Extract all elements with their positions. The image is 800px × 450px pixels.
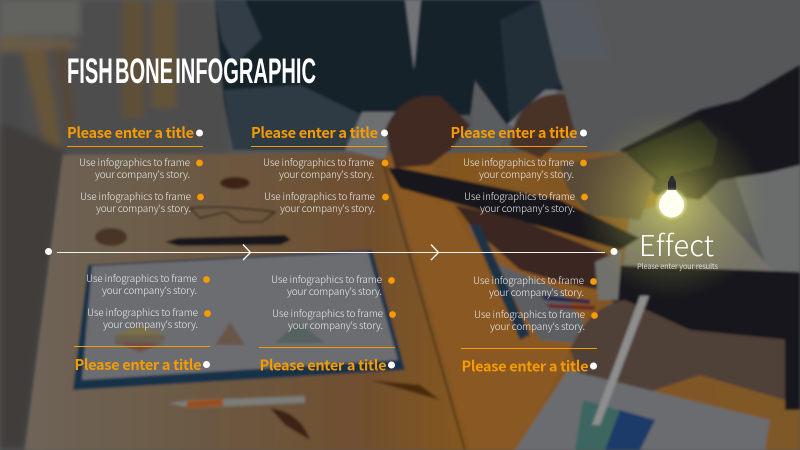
icon: light bulb [656,176,686,219]
panel: top cause 3: your company's story. [479,166,574,181]
panel: top cause 3 [450,122,588,215]
panel: bottom cause 2: your company's story. [287,283,382,298]
panel: bottom cause 1: your company's story. [103,316,198,331]
heading: Please enter a title [74,354,202,375]
pens and glasses [165,235,291,246]
heading: Please enter a title [67,122,194,143]
heading: Please enter a title [251,122,378,143]
title: FISH BONE INFOGRAPHIC [67,52,316,91]
heading: Please enter a title [450,122,578,143]
effect subtext: Please enter your results [637,261,718,272]
panel: bottom cause 1: your company's story. [102,282,197,297]
marker [203,361,210,368]
text block: Use infographics to frame [473,272,584,287]
panel: top cause 2: your company's story. [279,166,374,181]
panel: top cause 3: your company's story. [480,200,575,215]
clipboard [73,250,405,390]
report on lower right [515,370,770,450]
panel: bottom cause 3: your company's story. [489,284,584,299]
heading: Please enter a title [260,354,386,376]
marker [196,130,203,136]
panel: bottom cause 3: Use infographics to frame [474,306,585,321]
text block: Use infographics to frame [79,154,190,169]
text block: Use infographics to frame [86,270,197,285]
text block: Use infographics to frame [463,154,574,169]
panel: bottom cause 1: Use infographics to frame [87,304,198,319]
panel: bottom cause 2: your company's story. [288,317,383,332]
text block: Use infographics to frame [263,154,374,169]
marker [590,362,597,370]
panel: bottom cause 2: Use infographics to frame [272,305,383,320]
central suit [215,0,563,150]
wood table [25,152,800,450]
panel: top cause 2: Use infographics to frame [264,188,375,203]
panel: bottom cause 1 [74,270,211,375]
marker [388,362,395,368]
panel: top cause 1 [67,122,204,215]
panel: bottom cause 3: your company's story. [490,318,585,333]
panel: bottom cause 3 [461,272,598,376]
right suit, hand with pen [610,265,800,395]
panel: top cause 3: Use infographics to frame [464,188,575,203]
hands and tablet [385,96,470,168]
panel: top cause 1: your company's story. [95,166,190,181]
marker [580,130,587,136]
panel: top cause 2 [251,122,389,215]
panel: bottom cause 2 [259,271,396,376]
text block: Use infographics to frame [271,271,382,286]
marker [381,130,388,136]
spine arrow [45,244,618,260]
heading: Please enter a title [462,356,588,376]
panel: top cause 1: Use infographics to frame [80,188,191,203]
panel: top cause 1: your company's story. [96,200,191,215]
panel: top cause 2: your company's story. [280,200,375,215]
effect heading: Effect [639,223,714,265]
